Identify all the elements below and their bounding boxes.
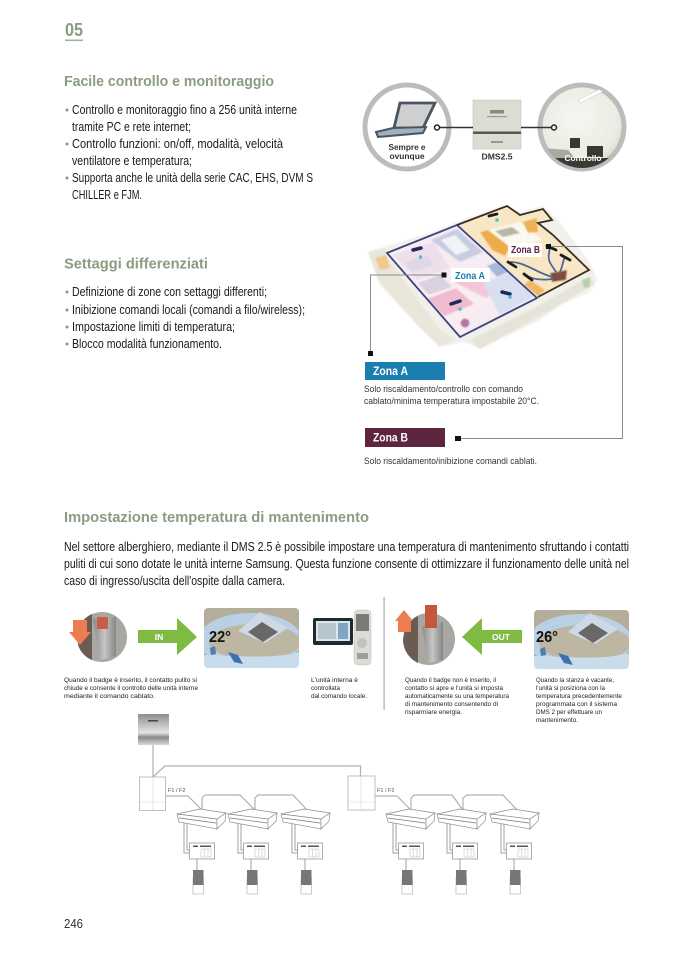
floor plan: zones A and B — [368, 205, 597, 349]
arrow: OUT: OUT — [492, 632, 511, 642]
icon: laptop circle: Sempre e — [388, 143, 426, 152]
caption: badge inserted — [64, 677, 198, 700]
bullet list: settaggi: Inibizione comandi locali (comandi a filo/wireless); — [72, 303, 305, 317]
heading: impostazione temperatura: Impostazione temperatura di mantenimento — [64, 509, 369, 526]
zone A outline — [387, 225, 537, 337]
diagram: DMS connection — [365, 85, 624, 172]
bullet list: controllo: tramite PC e rete internet; — [72, 120, 191, 134]
label: F1/F2 left: F1 / F2 — [168, 788, 185, 794]
bullet list: settaggi: Blocco modalità funzionamento. — [72, 337, 222, 351]
caption: badge removed: di mantenimento consentendo di — [405, 701, 498, 708]
badge: zona B: Zona B — [373, 430, 408, 444]
zone A floor — [387, 225, 537, 337]
caption: badge inserted: Quando il badge è inserito, il contatto pulito si — [64, 677, 197, 684]
text: zona A description: Solo riscaldamento/controllo con comando — [364, 384, 523, 394]
caption: vacant room: DMS 2 per effettuare un — [536, 709, 602, 716]
photo: cassette unit at 22 degrees — [198, 608, 302, 668]
paragraph: hotel sector: caso di ingresso/uscita dell'ospite dalla camera. — [64, 574, 285, 588]
caption: vacant room — [536, 677, 622, 724]
outdoor unit 2 — [348, 776, 375, 810]
photo: cassette unit at 26 degrees: 26° — [536, 629, 558, 646]
caption: vacant room: programmata con il sistema — [536, 701, 617, 708]
building shell — [368, 205, 597, 349]
icon: laptop circle — [365, 85, 449, 169]
bus cables — [153, 745, 360, 777]
caption: vacant room: l'unità si posiziona con la — [536, 685, 605, 692]
arrow: OUT — [462, 618, 522, 655]
photo: cassette unit at 26 degrees — [528, 610, 632, 669]
caption: local control: dal comando locale. — [311, 693, 367, 700]
photo: cassette unit at 22 degrees: 22° — [209, 629, 231, 646]
caption: badge removed: risparmiare energia. — [405, 709, 462, 716]
caption: badge inserted: mediante il comando cablato. — [64, 693, 155, 700]
pipes in zone B — [510, 248, 565, 280]
icon: badge removed — [395, 605, 455, 665]
bullet list: controllo — [66, 103, 313, 202]
page number: 246 — [64, 917, 83, 931]
caption: local control: controllata — [311, 685, 340, 692]
cables: group 1 — [166, 795, 308, 811]
caption: badge removed — [405, 677, 509, 716]
cables: group 2 — [375, 795, 518, 811]
text: zona A description — [364, 384, 539, 406]
paragraph: hotel sector — [64, 540, 629, 588]
caption: local control — [311, 677, 367, 700]
bullet list: controllo: Controllo e monitoraggio fino a 256 unità interne — [72, 103, 297, 117]
bullet list: settaggi — [66, 285, 305, 351]
label: Zona A tag — [451, 268, 490, 282]
icon: laptop circle: ovunque — [390, 152, 425, 161]
icon: controllo room photo — [540, 85, 624, 172]
leader line: zona A — [368, 272, 446, 356]
label: Zona B tag — [508, 243, 542, 257]
vertical divider — [384, 597, 385, 710]
icon: controllo room photo: Controllo — [564, 153, 602, 163]
bullet list: settaggi: Definizione di zone con settaggi differenti; — [72, 285, 267, 299]
indoor units group 2 — [386, 809, 539, 829]
wiring diagram — [138, 714, 539, 894]
zone B outline — [457, 206, 589, 297]
icon: DMS2.5 device: DMS2.5 — [482, 152, 513, 162]
DMS device — [138, 714, 169, 745]
leader line: zona B — [455, 244, 622, 441]
caption: badge removed: automaticamente su una temperatura — [405, 693, 509, 700]
zone B floor — [457, 206, 589, 297]
indoor units group 1 — [177, 809, 330, 829]
outdoor unit 1 — [140, 777, 166, 810]
label: Zona A tag: Zona A — [455, 271, 485, 282]
badge: zona B — [365, 428, 445, 447]
badge: zona A — [365, 362, 445, 380]
caption: badge removed: Quando il badge non è inserito, il — [405, 677, 497, 684]
caption: vacant room: temperatura precedentemente — [536, 693, 622, 700]
connector lines and dots — [434, 125, 556, 130]
heading: settaggi differenziati: Settaggi differenziati — [64, 256, 208, 272]
heading: facile controllo: Facile controllo e monitoraggio — [64, 73, 274, 90]
arrow: IN: IN — [155, 632, 163, 642]
icon: tablet and remote control — [313, 610, 371, 665]
controllers and remotes group 1 — [184, 823, 322, 894]
badge: zona A: Zona A — [373, 364, 408, 378]
bullet list: controllo: Supporta anche le unità della serie CAC, EHS, DVM S — [72, 171, 313, 185]
label: F1/F2 right: F1 / F2 — [377, 788, 394, 794]
indoor units — [413, 214, 570, 309]
caption: vacant room: Quando la stanza è vacante, — [536, 677, 614, 684]
caption: vacant room: mantenimento. — [536, 717, 578, 724]
bullet list: controllo: CHILLER e FJM. — [72, 188, 142, 202]
label: Zona B tag: Zona B — [511, 245, 540, 256]
bullet list: settaggi: Impostazione limiti di temperatura; — [72, 320, 235, 334]
controllers and remotes group 2 — [393, 823, 532, 894]
icon: DMS2.5 device — [473, 100, 521, 162]
bullet list: controllo: Controllo funzioni: on/off, modalità, velocità — [72, 137, 283, 151]
arrow: IN — [138, 618, 197, 655]
bullet list: controllo: ventilatore e temperatura; — [72, 154, 192, 168]
page section number: 05 — [65, 20, 83, 40]
caption: badge inserted: chiude e consente il controllo delle unità interne — [64, 685, 198, 692]
icon: badge inserted — [69, 612, 127, 662]
caption: local control: L'unità interna è — [311, 677, 358, 684]
text: zona A description: cablato/minima temperatura impostabile 20°C. — [364, 396, 539, 406]
text: zona B description: Solo riscaldamento/inibizione comandi cablati. — [364, 456, 537, 466]
caption: badge removed: contatto si apre e l'unità si imposta — [405, 685, 503, 692]
